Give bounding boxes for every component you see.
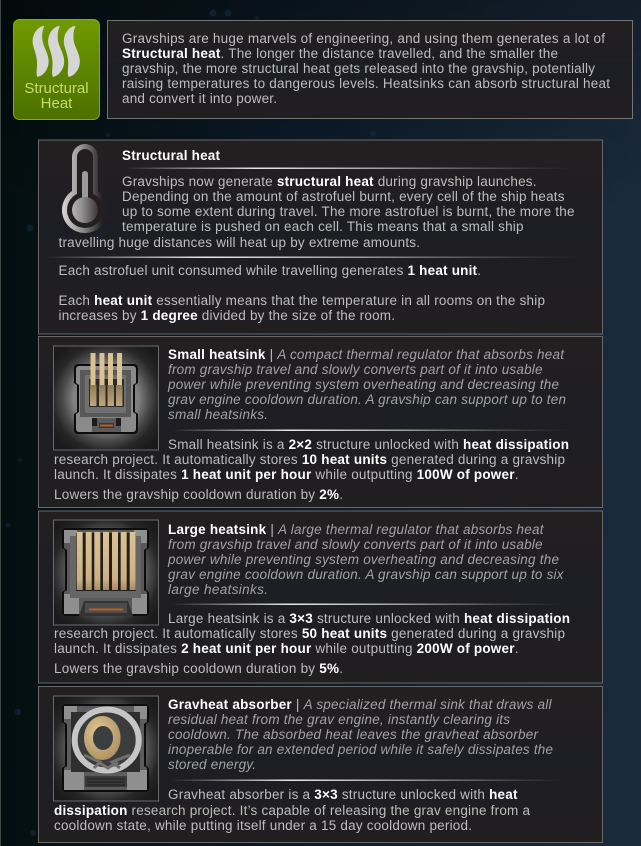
heading and description (167, 522, 565, 597)
intro text (122, 31, 610, 106)
heading and description: stored energy. (168, 757, 256, 772)
details: launch. It dissipates 2 heat unit per hour while outputting 200W of power. (54, 641, 518, 656)
heading and description: from gravship travel and slowly converts part of it into usable (168, 362, 542, 377)
heading and description: power while preventing system overheating and decreasing the (167, 377, 559, 392)
heading and description: inoperable for an extended period while it safely dissipates the (168, 742, 553, 757)
details (54, 611, 570, 676)
panel: small heatsink (38, 336, 602, 508)
paragraph: travelling huge distances will heat up by extreme amounts. (58, 235, 420, 250)
details (54, 787, 530, 833)
intro text: Gravships are huge marvels of engineering, and using them generates a lot of (122, 31, 605, 46)
heading: Structural heat (122, 148, 220, 163)
icon: small heatsink (54, 346, 158, 450)
heading and description: cooldown. The absorbed heat leaves the gravheat absorber (168, 727, 538, 742)
heading and description (167, 347, 566, 422)
icon: gravheat absorber (54, 696, 158, 801)
heading and description: Small heatsink | A compact thermal regulator that absorbs heat (168, 347, 565, 362)
heading and description: large heatsinks. (168, 582, 268, 597)
heading and description: from gravship travel and slowly converts part of it into usable (168, 537, 542, 552)
intro text: Structural heat. The longer the distance travelled, and the smaller the (122, 46, 558, 61)
panel: intro (108, 20, 632, 118)
details: research project. It automatically stores 50 heat units generated during a gravship (54, 626, 565, 641)
heading and description: grav engine cooldown duration. A gravship can support up to six (168, 567, 565, 582)
panel: structural heat (38, 140, 602, 334)
icon: structural heat badge (14, 20, 100, 120)
heat unit notes: Each astrofuel unit consumed while travelling generates 1 heat unit. (58, 263, 481, 278)
panel: large heatsink (38, 511, 602, 683)
heading and description: Large heatsink | A large thermal regulator that absorbs heat (168, 522, 545, 537)
paragraph: Gravships now generate structural heat during gravship launches. (122, 174, 536, 189)
heading and description: small heatsinks. (168, 407, 268, 422)
details: launch. It dissipates 1 heat unit per hour while outputting 100W of power. (54, 467, 518, 482)
details: Lowers the gravship cooldown duration by 5%. (54, 661, 343, 676)
paragraph: Depending on the amount of astrofuel burnt, every cell of the ship heats (122, 189, 565, 204)
details: Lowers the gravship cooldown duration by 2%. (54, 487, 343, 502)
heading and description: grav engine cooldown duration. A gravship can support up to ten (168, 392, 566, 407)
intro text: gravship, the more structural heat gets released into the gravship, potentially (122, 61, 595, 76)
details: cooldown state, while putting itself under a 15 day cooldown period. (54, 818, 472, 833)
icon: large heatsink (54, 520, 158, 625)
details: research project. It automatically stores 10 heat units generated during a gravship (54, 452, 565, 467)
details: Gravheat absorber is a 3×3 structure unlocked with heat (168, 787, 518, 802)
details (54, 437, 569, 502)
details: dissipation research project. It’s capable of releasing the grav engine from a (54, 803, 530, 818)
details: Small heatsink is a 2×2 structure unlocked with heat dissipation (168, 437, 569, 452)
intro text: raising temperatures to dangerous levels. Heatsinks can absorb structural heat (122, 76, 610, 91)
heading and description: residual heat from the grav engine, instantly clearing its (168, 712, 510, 727)
heat unit notes: increases by 1 degree divided by the size of the room. (58, 308, 395, 323)
paragraph (58, 174, 574, 250)
badge label: Structural (24, 80, 89, 97)
badge label: Heat (41, 95, 73, 112)
icon: thermometer (62, 144, 108, 233)
panel: gravheat absorber (38, 686, 602, 842)
intro text: and convert it into power. (122, 91, 277, 106)
heading and description: power while preventing system overheating and decreasing the (167, 552, 559, 567)
details: Large heatsink is a 3×3 structure unlocked with heat dissipation (168, 611, 570, 626)
paragraph: temperature is pushed on each cell. This means that a small ship (122, 219, 524, 234)
heading and description (168, 697, 553, 772)
heat unit notes (58, 263, 545, 323)
heading and description: Gravheat absorber | A specialized thermal sink that draws all (168, 697, 552, 712)
paragraph: up to some extent during travel. The more astrofuel is burnt, the more the (122, 204, 574, 219)
icon: heat waves (33, 26, 80, 77)
heat unit notes: Each heat unit essentially means that the temperature in all rooms on the ship (58, 293, 545, 308)
